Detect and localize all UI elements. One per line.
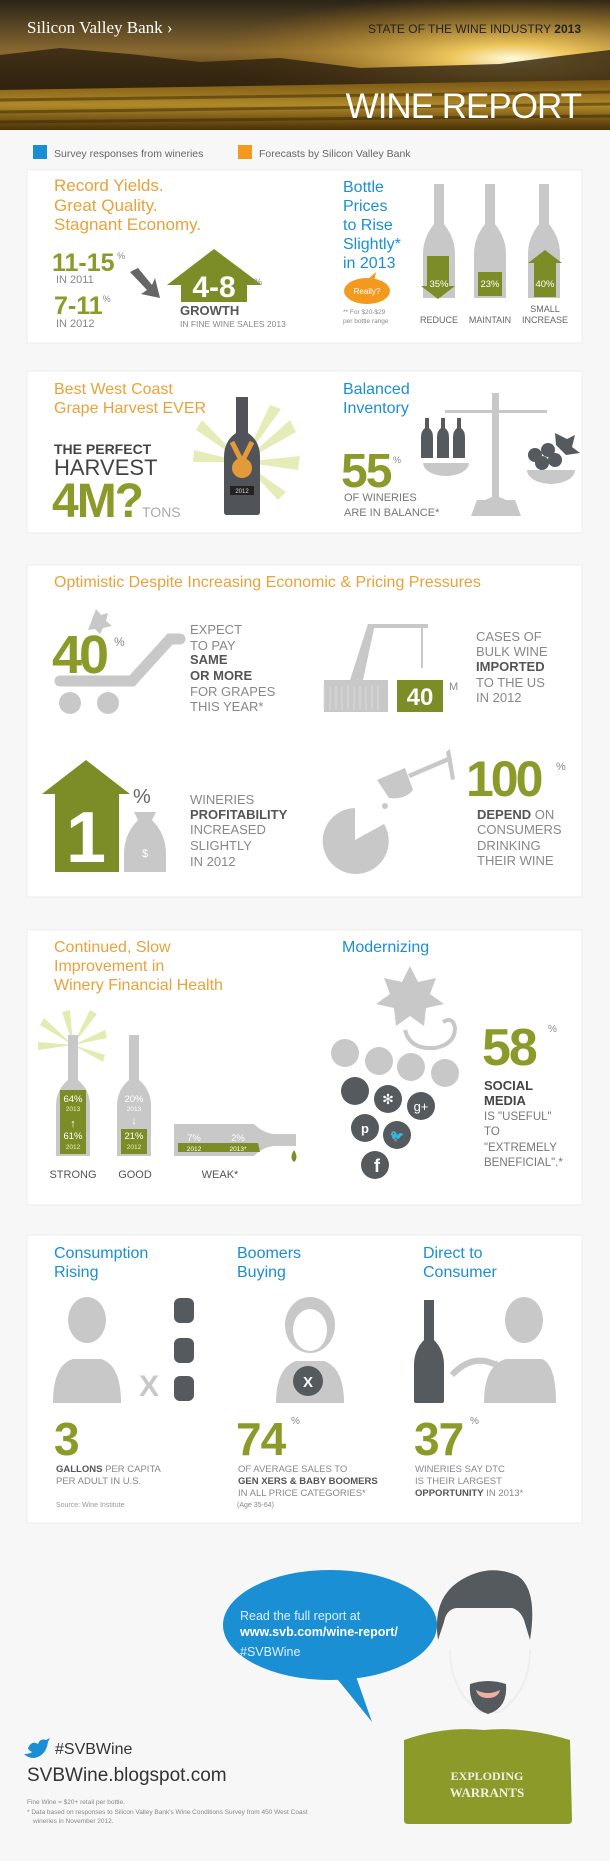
icon: glass pouring into pie <box>323 749 455 874</box>
stat 37%: IS THEIR LARGEST <box>415 1476 502 1487</box>
panel 1: INCREASE <box>522 315 568 325</box>
icon: medal bottle with rays <box>193 397 300 515</box>
panel 1: IN 2011 <box>56 274 94 286</box>
stat 37%: OPPORTUNITY IN 2013* <box>415 1488 524 1499</box>
chart: strong/good/weak bottles: 64% <box>63 1094 83 1105</box>
panel 1: % <box>254 277 262 287</box>
icon: grapes with social media <box>331 966 459 1179</box>
panel 1: 7-11 <box>54 292 103 320</box>
icon: person x jugs <box>53 1297 194 1403</box>
panel 1: 4-8 <box>192 271 236 304</box>
icon: up arrow 1%: $ <box>142 848 148 860</box>
icon: person x jugs: X <box>139 1370 159 1403</box>
callout: speech bubble: #SVBWine <box>240 1645 300 1659</box>
footnotes: Fine Wine = $20+ retail per bottle. <box>27 1799 125 1806</box>
panel 4: MEDIA <box>484 1093 526 1108</box>
logo: Silicon Valley Bank: Silicon Valley Bank › <box>27 18 173 37</box>
panel 1: ** For $20-$29 <box>343 309 386 316</box>
icon: medal bottle with rays: 2012 <box>235 489 249 495</box>
chart: strong/good/weak bottles: 2013 <box>127 1106 142 1113</box>
icon: up arrow 1% <box>42 760 166 878</box>
bottles chart <box>423 184 560 298</box>
panel 1: MAINTAIN <box>469 315 511 325</box>
panel 1: to Rise <box>343 217 393 234</box>
legend <box>33 145 411 160</box>
icon: boomer <box>276 1297 344 1403</box>
icon: grapes with social media: 🐦 <box>390 1129 405 1143</box>
text: expect to pay: THIS YEAR* <box>190 699 263 714</box>
panel 3: THEIR WINE <box>477 853 554 868</box>
icon: cart 40%: 40 <box>52 625 107 685</box>
stat 3 gallons: 3 <box>54 1413 80 1465</box>
text: bulk wine <box>476 629 548 705</box>
heading: record yields: Record Yields. <box>54 176 164 195</box>
icon: crane 40M: 40 <box>407 684 433 711</box>
panel 1: IN FINE WINE SALES 2013 <box>180 319 286 329</box>
heading: best harvest: Best West Coast <box>54 381 173 398</box>
panel 3: DRINKING <box>477 838 541 853</box>
stat 74%: (Age 35-64) <box>237 1502 274 1509</box>
chart: strong/good/weak bottles <box>38 1010 296 1181</box>
panel 5: Rising <box>54 1264 98 1281</box>
chart: strong/good/weak bottles: 7% <box>187 1133 201 1144</box>
blog url: SVBWine.blogspot.com <box>27 1765 227 1786</box>
stat 3 gallons: GALLONS PER CAPITA <box>56 1464 162 1475</box>
stat 74%: GEN XERS & BABY BOOMERS <box>238 1476 378 1487</box>
panel 1: per bottle range <box>343 318 389 325</box>
text: expect to pay: EXPECT <box>190 622 242 637</box>
chart: strong/good/weak bottles: 21% <box>124 1131 144 1142</box>
stat 58% social media: 58 <box>482 1019 537 1077</box>
panel 2: OF WINERIES <box>344 492 417 504</box>
stat 74% <box>236 1413 378 1509</box>
panel 2: Inventory <box>343 400 409 417</box>
text: profitability: WINERIES <box>190 792 255 807</box>
panel 5: Buying <box>237 1264 286 1281</box>
icon: man with t-shirt: WARRANTS <box>450 1785 524 1800</box>
heading: optimistic: Optimistic Despite Increasing Economic & Pricing Pressures <box>54 574 481 591</box>
stat 55%: 55 <box>341 445 392 498</box>
chart: strong/good/weak bottles: 2013* <box>230 1146 247 1153</box>
icon: man with t-shirt: EXPLODING <box>451 1769 523 1783</box>
chart: strong/good/weak bottles: 2% <box>231 1133 245 1144</box>
panel 2 <box>27 371 582 533</box>
panel 1: IN 2012 <box>56 318 95 330</box>
chart: strong/good/weak bottles: ↓ <box>131 1115 137 1127</box>
bubble: Really? <box>344 278 390 304</box>
callout: speech bubble: www.svb.com/wine-report/ <box>239 1625 398 1639</box>
panel 1: Prices <box>343 198 387 215</box>
panel 4 <box>27 930 582 1205</box>
text: profitability: SLIGHTLY <box>190 838 252 853</box>
house arrow 4-8% <box>167 249 262 302</box>
text: profitability: PROFITABILITY <box>190 807 288 822</box>
chart: strong/good/weak bottles: GOOD <box>118 1169 152 1181</box>
callout: speech bubble: Read the full report at <box>240 1609 361 1623</box>
text: profitability: IN 2012 <box>190 854 236 869</box>
panel 1: % <box>103 294 111 304</box>
stat 100%: 100 <box>466 751 542 807</box>
panel 3 <box>27 565 582 897</box>
icon: crane 40M: M <box>449 681 458 693</box>
arrow down-right <box>130 268 160 298</box>
chart: strong/good/weak bottles: STRONG <box>49 1169 97 1181</box>
chart: strong/good/weak bottles: 2013 <box>66 1106 81 1113</box>
icon: cart 40% <box>52 609 180 714</box>
panel 2: Grape Harvest EVER <box>54 400 206 417</box>
icon: grapes with social media: ✻ <box>382 1091 394 1107</box>
chart: strong/good/weak bottles: 61% <box>63 1131 83 1142</box>
panel 4: "EXTREMELY <box>484 1142 557 1154</box>
text: expect to pay <box>190 622 276 714</box>
heading: modernizing: Modernizing <box>342 939 429 956</box>
text: expect to pay: OR MORE <box>190 668 252 683</box>
icon: up arrow 1%: 1 <box>66 798 106 878</box>
icon: man with t-shirt <box>404 1570 572 1824</box>
text: profitability: INCREASED <box>190 822 266 837</box>
text: bulk wine: IN 2012 <box>476 690 522 705</box>
panel 4: % <box>548 1024 557 1035</box>
panel 1: SMALL <box>530 304 560 314</box>
heading: financial health: Continued, Slow <box>54 939 171 956</box>
panel 1: 23% <box>480 279 500 290</box>
icon: bottle to consumer <box>414 1297 556 1403</box>
text: expect to pay: FOR GRAPES <box>190 684 276 699</box>
icon: grapes with social media: g+ <box>414 1099 428 1114</box>
text: bulk wine: TO THE US <box>476 675 545 690</box>
heading: balanced inventory: Balanced <box>343 381 410 398</box>
panel 1: GROWTH <box>180 303 239 318</box>
text: bulk wine: IMPORTED <box>476 659 545 674</box>
panel 2: % <box>393 455 401 465</box>
stat 3 gallons: Source: Wine Institute <box>56 1502 125 1509</box>
chart: strong/good/weak bottles: 2012 <box>66 1144 81 1151</box>
stat 11-15%: 11-15 <box>52 249 115 277</box>
stat: perfect harvest: THE PERFECT <box>54 441 152 457</box>
heading: direct to consumer: Direct to <box>423 1245 483 1262</box>
icon: crane 40M <box>324 624 458 712</box>
panel 4: SOCIAL <box>484 1078 533 1093</box>
icon: up arrow 1%: % <box>133 786 151 808</box>
panel 2: 4M?TONS <box>52 475 181 528</box>
icon: boomer: X <box>303 1374 313 1391</box>
icon: balance scale <box>421 393 580 516</box>
stat 3 gallons: PER ADULT IN U.S. <box>56 1476 141 1487</box>
stat 11-15%: % <box>115 251 125 261</box>
stat 74%: % <box>291 1416 300 1427</box>
chart: strong/good/weak bottles: 2012 <box>187 1146 202 1153</box>
stat 37%: WINERIES SAY DTC <box>415 1464 505 1475</box>
panel 1: Really? <box>354 287 381 296</box>
panel 5: Consumer <box>423 1264 497 1281</box>
panel 1 <box>27 170 582 343</box>
panel 3: DEPEND ON <box>477 807 554 822</box>
twitter handle: #SVBWine <box>55 1741 132 1758</box>
heading: boomers buying: Boomers <box>237 1245 301 1262</box>
panel 1: 35% <box>429 279 449 290</box>
footnotes: wineries in November 2012. <box>32 1818 114 1825</box>
legend: Forecasts by Silicon Valley Bank <box>259 148 411 160</box>
panel 4: BENEFICIAL".* <box>484 1157 563 1169</box>
stat 74%: IN ALL PRICE CATEGORIES* <box>238 1488 366 1499</box>
text: bulk wine: BULK WINE <box>476 644 548 659</box>
heading: consumption rising: Consumption <box>54 1245 148 1262</box>
header subtitle: STATE OF THE WINE INDUSTRY 2013 <box>368 22 581 36</box>
twitter handle <box>24 1738 132 1758</box>
heading: bottle prices: Bottle <box>343 179 384 196</box>
text: bulk wine: CASES OF <box>476 629 542 644</box>
panel 5 <box>27 1235 582 1523</box>
panel 2: HARVEST <box>54 455 158 480</box>
icon: grapes with social media: f <box>374 1156 381 1176</box>
legend: Survey responses from wineries <box>54 148 203 160</box>
title: WINE REPORT: WINE REPORT <box>346 87 582 126</box>
icon: grapes with social media: p <box>361 1121 369 1136</box>
panel 1: Great Quality. <box>54 196 158 215</box>
panel 4: TO <box>484 1126 500 1138</box>
panel 3: % <box>556 761 566 773</box>
text: expect to pay: TO PAY <box>190 638 236 653</box>
panel 1: Stagnant Economy. <box>54 215 201 234</box>
header photo <box>0 0 610 130</box>
chart: strong/good/weak bottles: 20% <box>124 1094 144 1105</box>
chart: strong/good/weak bottles: ↑ <box>70 1118 76 1130</box>
stat 37%: % <box>470 1416 479 1427</box>
panel 2: ARE IN BALANCE* <box>344 507 440 519</box>
text: profitability <box>190 792 288 869</box>
stat 37%: 37 <box>414 1413 463 1465</box>
stat 3 gallons <box>54 1413 162 1509</box>
chart: strong/good/weak bottles: 2012 <box>127 1144 142 1151</box>
panel 4: Improvement in <box>54 958 164 975</box>
stat 37% <box>414 1413 524 1499</box>
icon: cart 40%: % <box>114 635 125 649</box>
text: expect to pay: SAME <box>190 652 228 667</box>
panel 4: IS "USEFUL" <box>484 1111 552 1123</box>
panel 4: Winery Financial Health <box>54 977 223 994</box>
chart: strong/good/weak bottles: WEAK* <box>202 1169 239 1181</box>
callout: speech bubble <box>223 1570 437 1722</box>
panel 1: in 2013 <box>343 255 396 272</box>
footnotes: * Data based on responses to Silicon Valley Bank's Wine Conditions Survey from 450 West Coast <box>27 1809 308 1816</box>
stat 74%: OF AVERAGE SALES TO <box>238 1464 347 1475</box>
panel 3: CONSUMERS <box>477 822 562 837</box>
panel 1: Slightly* <box>343 236 401 253</box>
footnotes <box>27 1799 308 1825</box>
panel 1: 40% <box>535 279 555 290</box>
panel 1: REDUCE <box>420 315 458 325</box>
stat 74%: 74 <box>236 1413 287 1465</box>
